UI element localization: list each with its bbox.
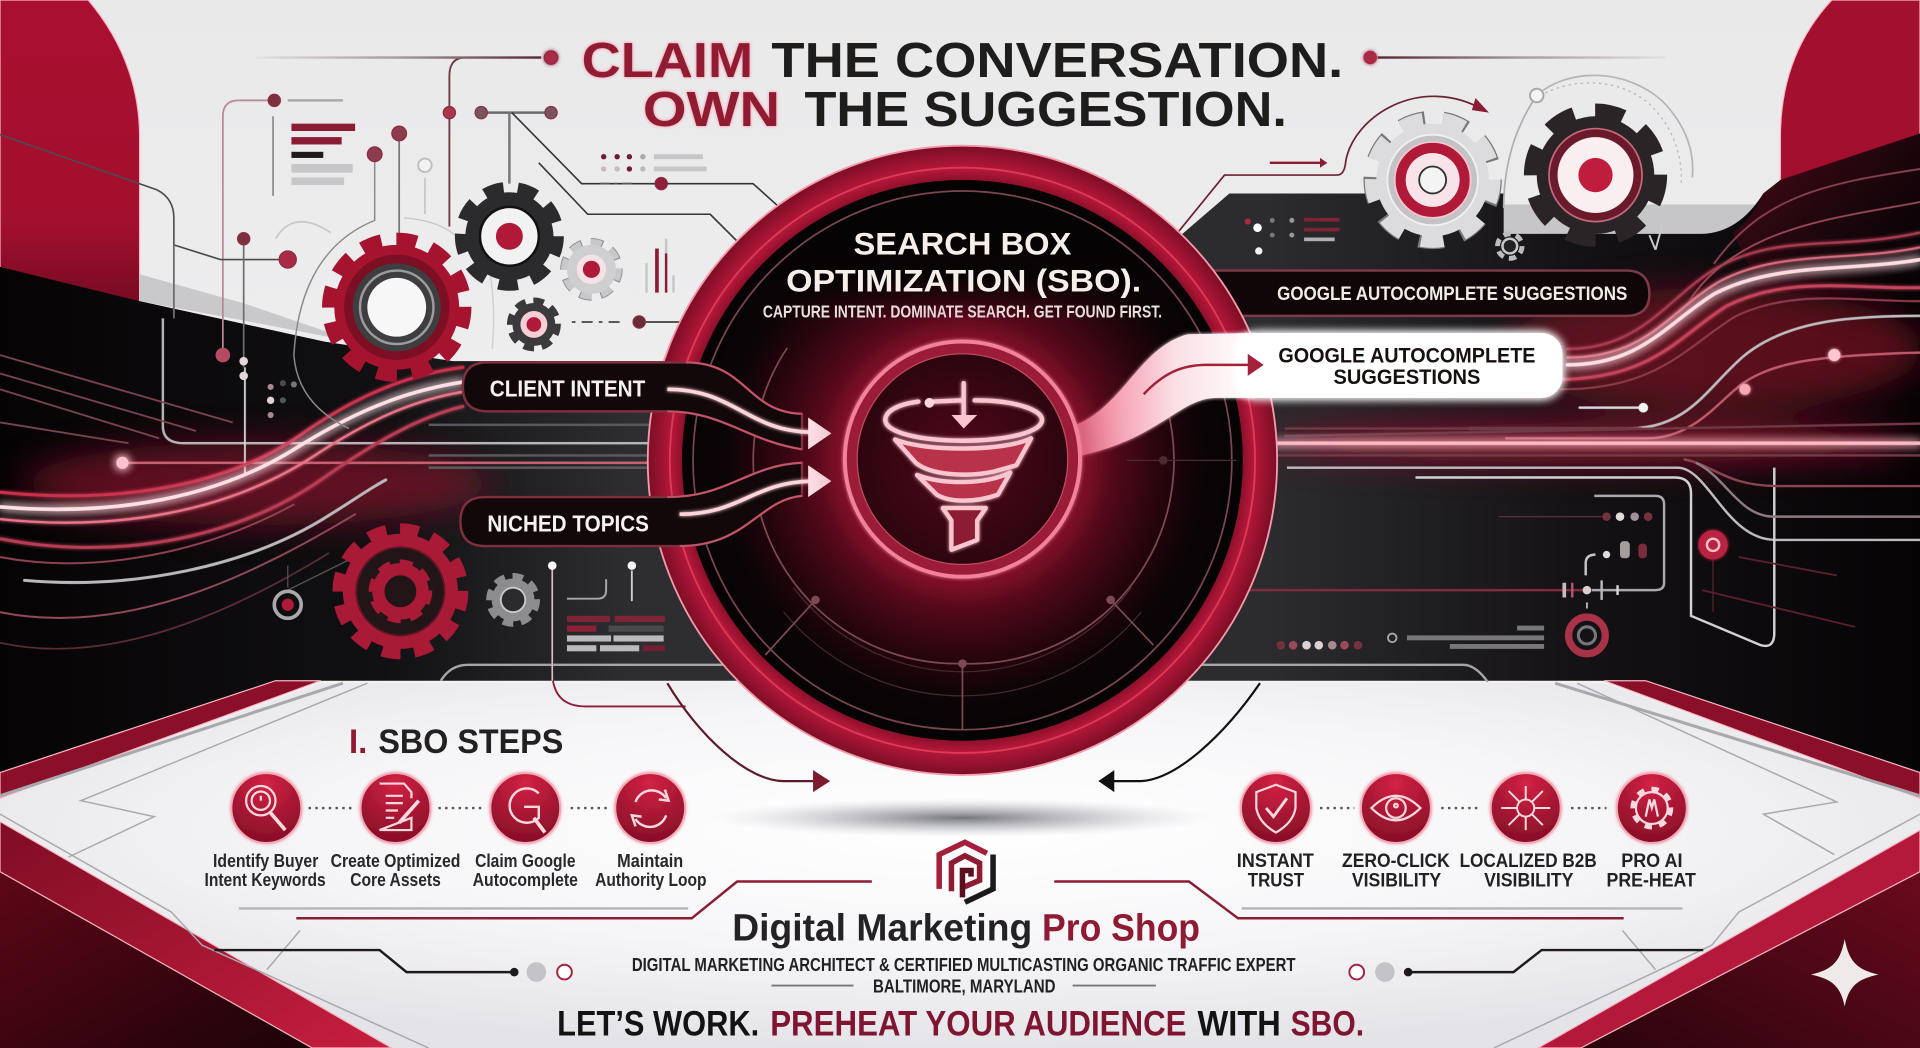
- benefit labels: VISIBILITY: [1352, 870, 1442, 891]
- lower left circuit: [548, 561, 686, 706]
- chart: mini vertical bars: [645, 239, 675, 293]
- band: top right red edge: [1604, 681, 1920, 798]
- heading: search box optimization: [786, 226, 1141, 298]
- indicators: right dark panel: [1245, 218, 1340, 255]
- logo: pro shop hexagon: [939, 842, 993, 902]
- step labels: Create Optimized: [331, 850, 460, 871]
- step labels: Maintain: [617, 850, 683, 871]
- heading: SBO steps: SBO STEPS: [378, 723, 563, 761]
- flow: output band to white pill: [1053, 333, 1255, 460]
- step labels: Intent Keywords: [204, 869, 326, 890]
- brand: location: BALTIMORE, MARYLAND: [873, 975, 1056, 996]
- benefit icon: zero click: [1361, 773, 1431, 843]
- gear: grey small: [564, 242, 618, 296]
- corner: bottom right red band: [1538, 830, 1920, 1048]
- steps connectors: dotted lines: [309, 807, 1607, 809]
- step labels: Authority Loop: [595, 869, 707, 890]
- step icon: authority loop: [615, 773, 685, 843]
- title: claim the conversation: CLAIM: [582, 34, 753, 88]
- corner: bottom left red band: [0, 822, 392, 1048]
- call to action: SBO.: [1291, 1004, 1364, 1044]
- shadow under circle: [711, 798, 1213, 837]
- gear: bottom left red: [339, 530, 462, 653]
- benefit icon: localized b2b: [1491, 773, 1561, 843]
- benefit labels: ZERO-CLICK: [1342, 851, 1450, 872]
- connector arrow: left to center: [667, 683, 830, 792]
- gear: bottom grey: [490, 577, 536, 623]
- call to action: PREHEAT YOUR AUDIENCE: [770, 1004, 1187, 1044]
- pill: white google autocomplete: SUGGESTIONS: [1333, 366, 1481, 389]
- step icon: identify keywords: [231, 773, 301, 843]
- icon: small arrow right: [1649, 223, 1663, 250]
- arrow: output to pill: [1144, 354, 1264, 394]
- pill: niched topics: NICHED TOPICS: [487, 510, 649, 536]
- icon: small ring node: [274, 566, 301, 618]
- circuit: top right: [1177, 56, 1693, 234]
- step labels: Identify Buyer: [213, 850, 318, 871]
- flow lines: right bundle: [1273, 169, 1920, 455]
- title: claim the conversation: THE CONVERSATION.: [771, 34, 1343, 88]
- brand: digital marketing pro shop: [732, 907, 1200, 949]
- brand: digital marketing pro shop: Pro Shop: [1042, 907, 1200, 949]
- gear: top right dark: [1532, 111, 1659, 239]
- gear: dark top: [462, 189, 557, 284]
- panel: dark central band: [0, 133, 1920, 796]
- benefit labels: VISIBILITY: [1484, 870, 1574, 891]
- call to action: [557, 1004, 1364, 1044]
- circuit lines: left in dark band: [0, 318, 649, 590]
- step labels: Autocomplete: [473, 869, 578, 890]
- title: claim the conversation: [582, 34, 1343, 88]
- heading: search box optimization: OPTIMIZATION (SBO).: [786, 262, 1141, 298]
- step labels: Claim Google: [475, 850, 576, 871]
- indicators: left small dots: [267, 380, 297, 418]
- heading: search box optimization: SEARCH BOX: [853, 226, 1071, 262]
- indicators: top center dots and bars: [601, 154, 707, 172]
- brand: digital marketing pro shop: Digital Marketing: [732, 907, 1032, 949]
- corner: bottom left maroon: [0, 872, 312, 1048]
- pill: dark google autocomplete: GOOGLE AUTOCOMPLETE SUGGESTIONS: [1277, 283, 1627, 305]
- connector arrow: right to center: [1098, 683, 1260, 792]
- band: grey shadow under left header: [140, 274, 422, 355]
- footer circuit left: [214, 950, 572, 982]
- heading: SBO steps: I.: [349, 723, 367, 761]
- panel outlines: grey circuit lines: [0, 683, 1920, 1048]
- benefit labels: LOCALIZED B2B: [1460, 851, 1597, 872]
- step labels: [204, 850, 707, 890]
- benefit labels: PRO AI: [1621, 851, 1682, 872]
- gear: top right silver: [1371, 119, 1494, 241]
- panel: bottom white hexagon: [0, 683, 1920, 1048]
- nodes: top left: [216, 51, 667, 380]
- title: own the suggestion: OWN: [643, 83, 780, 137]
- title: own the suggestion: THE SUGGESTION.: [804, 83, 1287, 137]
- indicators: lower right dots and bars: [1277, 512, 1728, 654]
- dividers: footer lines: [239, 881, 1682, 986]
- panel: top-right red block: [1780, 0, 1920, 208]
- benefit labels: PRE-HEAT: [1607, 870, 1696, 891]
- step labels: Core Assets: [350, 869, 441, 890]
- band: maroon tint top right: [1733, 133, 1920, 294]
- icon: sparkle star: [1811, 939, 1878, 1006]
- subheading: capture intent: CAPTURE INTENT. DOMINATE SEARCH. GET FOUND FIRST.: [763, 302, 1162, 322]
- benefit icon: instant trust: [1241, 773, 1311, 843]
- call to action: LET’S WORK.: [557, 1004, 759, 1044]
- panel: central circle: [648, 146, 1277, 775]
- band: grey shadow under right gears: [1501, 204, 1763, 235]
- gear: tiny grey: [1498, 234, 1522, 258]
- circuit: lower right panel: [441, 459, 1920, 682]
- pill: client intent: [463, 362, 831, 449]
- flow lines: left bundle: [0, 367, 463, 649]
- chart: top left bars: [291, 124, 355, 185]
- panel: top-left red block: [0, 0, 140, 318]
- step icon: claim google: [490, 773, 560, 843]
- benefit labels: TRUST: [1248, 870, 1304, 891]
- nodes: top right: [1320, 51, 1543, 168]
- corner: bottom right maroon: [1581, 872, 1920, 1048]
- gear: large red: [331, 241, 463, 373]
- nodes: right flow dots: [116, 349, 1840, 469]
- footer circuit right: [1349, 950, 1703, 982]
- pill: white google autocomplete: GOOGLE AUTOCOMPLETE: [1278, 344, 1536, 367]
- glow: left and right flow haze: [24, 288, 1920, 525]
- benefit labels: [1237, 851, 1696, 891]
- step icon: create assets: [361, 773, 430, 843]
- gear: small dark: [511, 301, 557, 348]
- pill: dark google autocomplete: [1206, 271, 1649, 316]
- pill: client intent: CLIENT INTENT: [490, 376, 645, 402]
- benefit icon: pro ai: [1617, 773, 1687, 843]
- brand: tagline: DIGITAL MARKETING ARCHITECT & CERTIFIED MULTICASTING ORGANIC TRAFFIC EXPERT: [632, 954, 1296, 975]
- pill: niched topics: [460, 463, 831, 546]
- circuit: top left lines: [0, 56, 778, 429]
- benefit labels: INSTANT: [1237, 851, 1314, 872]
- band: top left red edge: [0, 681, 321, 798]
- pill: white google autocomplete: [1237, 333, 1562, 398]
- icon: funnel medallion: [833, 331, 1092, 590]
- call to action: WITH: [1198, 1004, 1281, 1044]
